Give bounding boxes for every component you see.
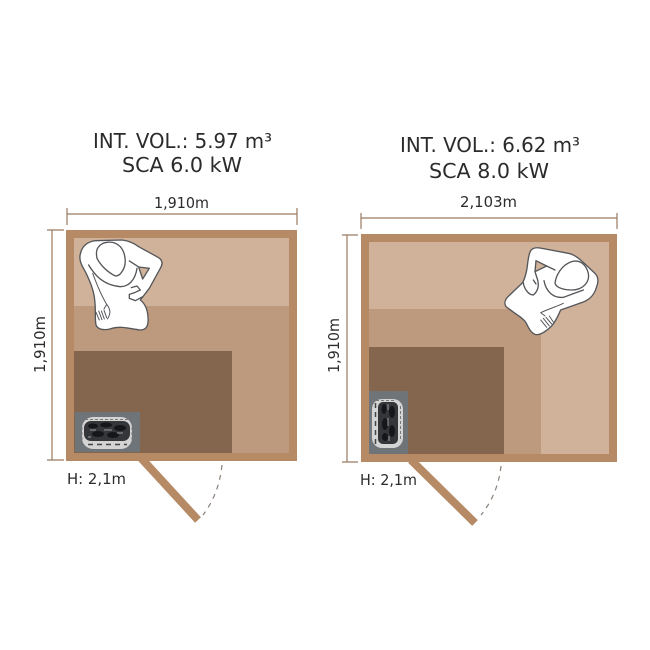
dimension: left depth bbox=[31, 230, 64, 460]
heading: left volume and heater: INT. VOL.: 5.97 m³ bbox=[93, 129, 272, 153]
panel: left sauna bbox=[31, 129, 297, 520]
heading: left volume and heater bbox=[93, 129, 272, 177]
icon: left person seated bbox=[80, 240, 162, 330]
dimension: right width bbox=[361, 193, 617, 229]
heading: right volume and heater: SCA 8.0 kW bbox=[429, 159, 549, 183]
dimension: right depth: 1,910m bbox=[325, 318, 343, 373]
door: left bbox=[141, 458, 222, 520]
label: left height: H: 2,1m bbox=[67, 470, 126, 488]
heading: right volume and heater: INT. VOL.: 6.62 m³ bbox=[400, 133, 580, 157]
panel: right sauna bbox=[325, 133, 617, 523]
dimension: right depth bbox=[325, 235, 358, 462]
icon: right person seated bbox=[505, 248, 598, 335]
floor plan: left room bbox=[66, 230, 297, 461]
icon: left heater bbox=[75, 412, 140, 452]
door: right bbox=[411, 460, 501, 523]
heading: right volume and heater bbox=[400, 133, 580, 183]
icon: right heater bbox=[369, 391, 408, 454]
dimension: right width: 2,103m bbox=[460, 193, 517, 211]
dimension: left depth: 1,910m bbox=[31, 316, 49, 373]
dimension: left width bbox=[67, 194, 297, 225]
heading: left volume and heater: SCA 6.0 kW bbox=[122, 153, 242, 177]
dimension: left width: 1,910m bbox=[154, 194, 209, 212]
label: right height: H: 2,1m bbox=[360, 471, 417, 489]
floor plan: right room bbox=[361, 234, 617, 462]
